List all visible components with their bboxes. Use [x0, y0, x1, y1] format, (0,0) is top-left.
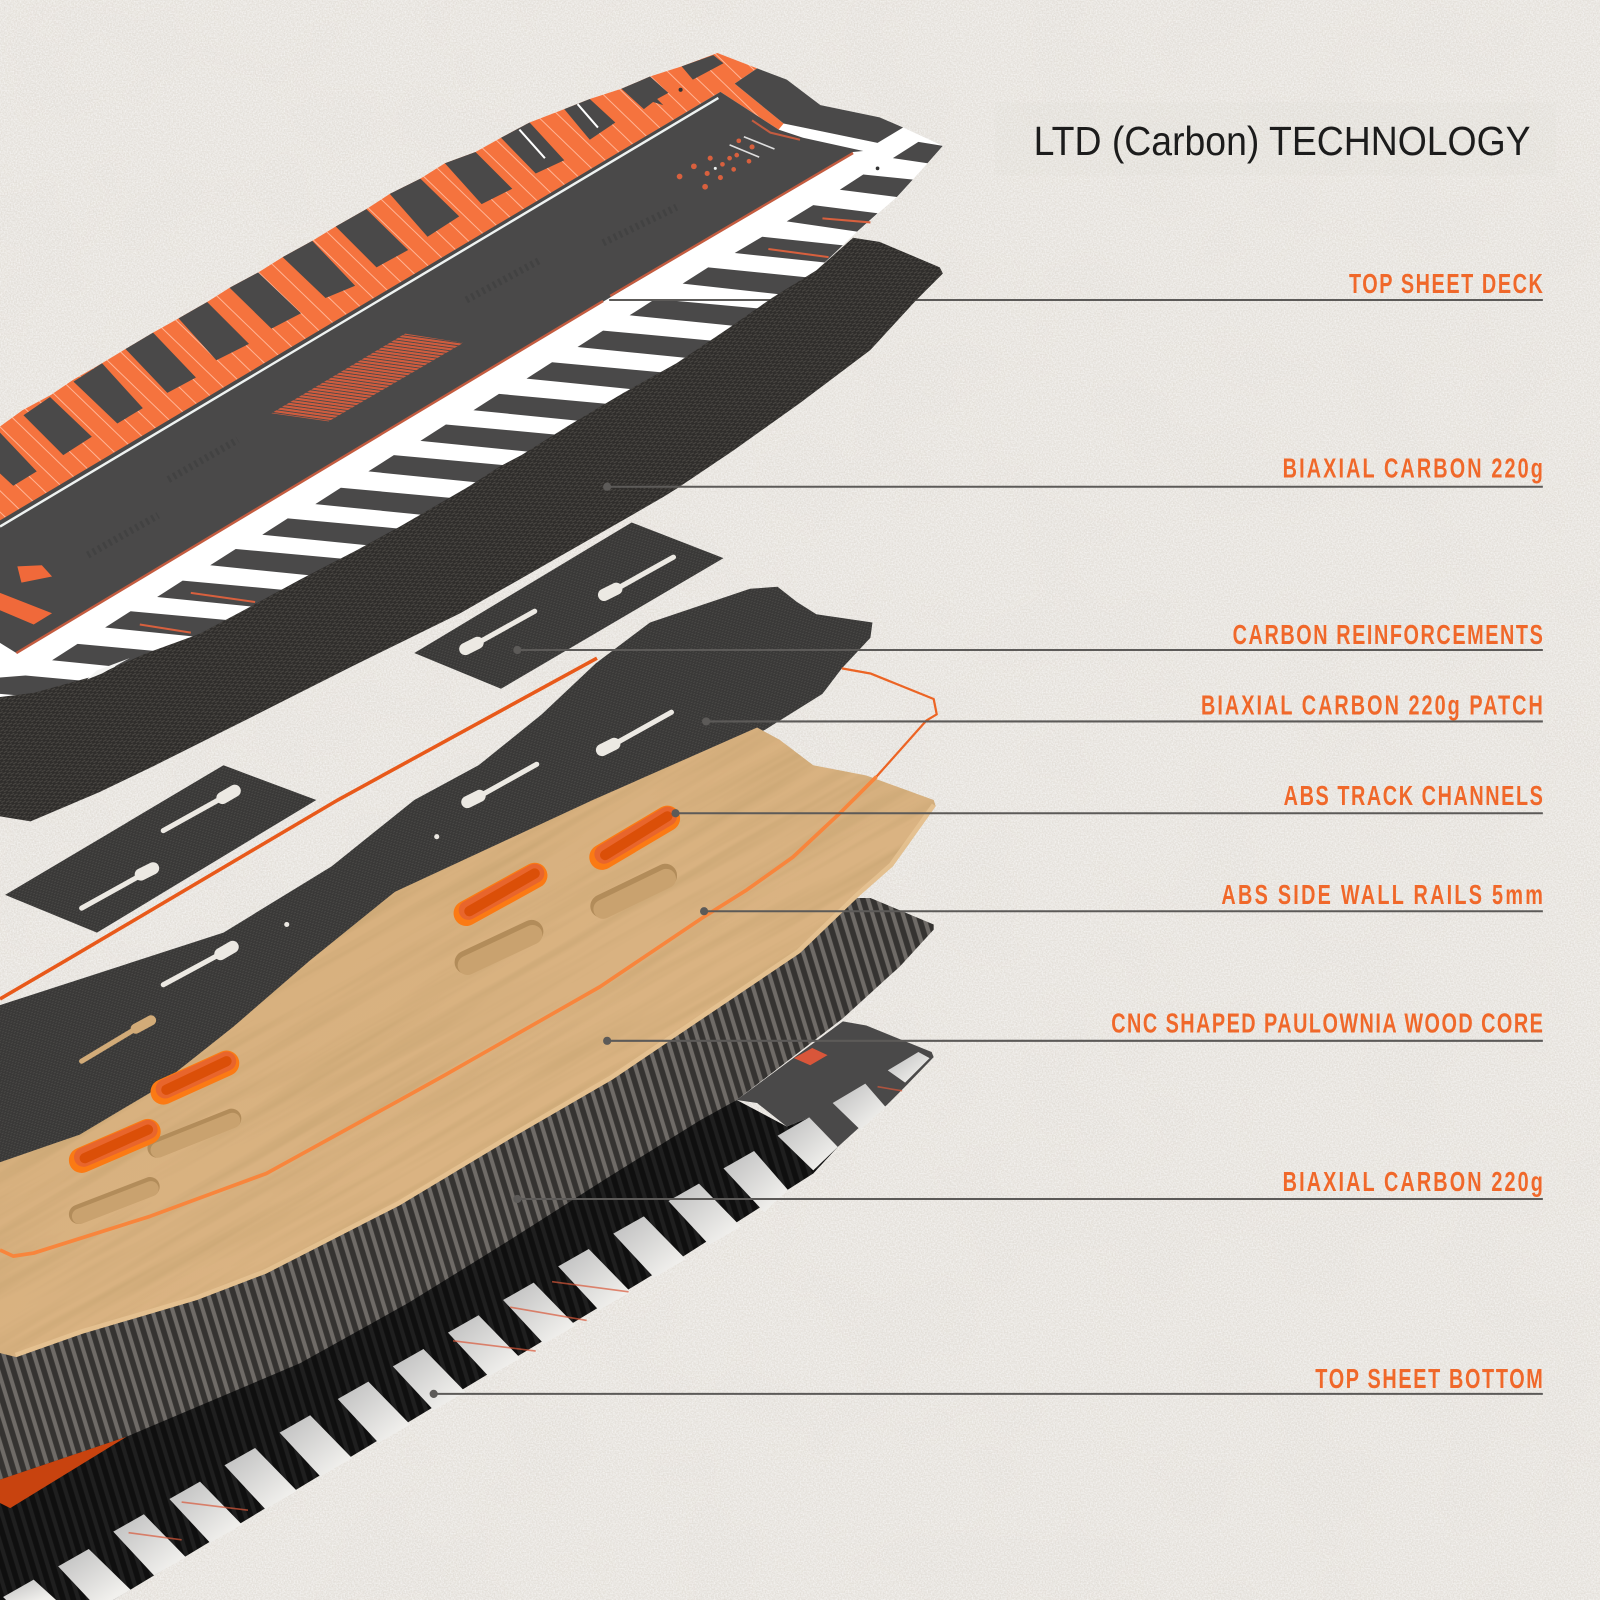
- label: biaxial carbon 220g: BIAXIAL CARBON 220g: [1283, 453, 1543, 484]
- layer: paulownia wood core: [0, 728, 936, 1358]
- title: LTD (Carbon) TECHNOLOGY: [1034, 118, 1531, 164]
- label: biaxial carbon 220g patch: BIAXIAL CARBON 220g PATCH: [1201, 690, 1543, 721]
- label: abs side wall rails 5mm: ABS SIDE WALL RAILS 5mm: [1221, 880, 1543, 911]
- ABS track channels: [82, 816, 667, 1160]
- layer: top sheet bottom: [0, 1021, 934, 1600]
- label: abs track channels: [671, 781, 1543, 817]
- orange pinstripe: [16, 153, 853, 653]
- orange bar and diamond logo: [0, 565, 52, 624]
- orange bottom sheet corner: [0, 1437, 127, 1508]
- label: abs side wall rails 5mm: [700, 880, 1543, 915]
- label: top sheet deck: TOP SHEET DECK: [1349, 269, 1543, 300]
- label: biaxial carbon 220g: [603, 453, 1543, 491]
- label: cnc shaped paulownia wood core: CNC SHAPED PAULOWNIA WOOD CORE: [1111, 1009, 1543, 1040]
- label: top sheet bottom: [430, 1364, 1543, 1398]
- label: carbon reinforcements: CARBON REINFORCEMENTS: [1233, 620, 1543, 651]
- routed recesses: [79, 876, 666, 1216]
- label: top sheet bottom: TOP SHEET BOTTOM: [1315, 1364, 1543, 1395]
- layer: biaxial carbon patch: [0, 587, 872, 1173]
- thin orange accents: [129, 1087, 902, 1540]
- red mark: [794, 1048, 828, 1065]
- pin holes: [284, 834, 439, 927]
- small orange logo marks near tail: [677, 138, 755, 190]
- white rail sliver over carbon: [87, 658, 130, 680]
- tan slot: [82, 1020, 151, 1061]
- white teeth: [3, 1052, 930, 1600]
- layer: carbon reinforcement lower: [5, 765, 316, 933]
- layer: biaxial carbon 220g: [0, 238, 943, 821]
- deck dark teeth: [0, 55, 723, 486]
- grey tail area: [737, 1021, 934, 1147]
- deck center dark panel: [0, 92, 863, 653]
- label: biaxial carbon 220g lower: BIAXIAL CARBON 220g: [1283, 1167, 1543, 1198]
- ABS rail outline behind patch: [0, 658, 597, 999]
- dotted grey marks: [88, 207, 677, 555]
- tail marks: [730, 120, 800, 157]
- slots and pin holes: [163, 712, 671, 985]
- layer: carbon reinforcement upper: [414, 522, 723, 689]
- hatched orange logo block: [271, 334, 463, 421]
- deck orange edge band: [0, 53, 784, 522]
- slots: [82, 791, 235, 908]
- label: biaxial carbon 220g patch: [702, 690, 1543, 726]
- layer: top sheet deck: [0, 53, 943, 709]
- black base sheet: [0, 1100, 838, 1600]
- label: cnc shaped paulownia wood core: [603, 1009, 1543, 1045]
- deck tail dark piece: [735, 68, 903, 143]
- layer: biaxial carbon 220g lower: [0, 898, 934, 1480]
- deck white rail band with stripes: [0, 98, 943, 709]
- slots: [465, 557, 673, 649]
- white centre line: [0, 98, 718, 527]
- label: biaxial carbon 220g lower: [513, 1167, 1543, 1203]
- label: abs track channels: ABS TRACK CHANNELS: [1284, 781, 1543, 812]
- ABS rail outline on wood: [0, 668, 937, 1256]
- label: carbon reinforcements: [513, 620, 1543, 654]
